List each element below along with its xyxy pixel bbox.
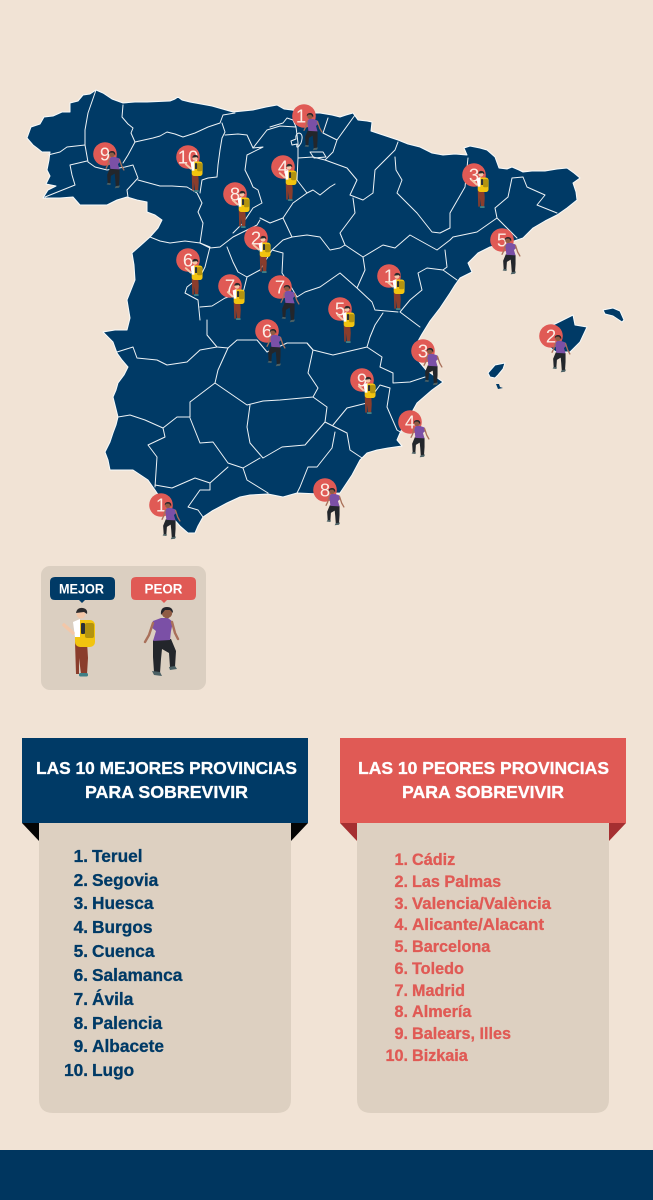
marker: Madrid 7 (peor): 7 [275,276,285,298]
marker: Lugo 10 (mejor) [176,145,203,192]
marker: Barcelona 5 (peor): 5 [497,230,507,250]
list: mejores [64,846,183,1080]
Formentera [496,384,503,389]
list: peores: 5. [394,938,408,956]
legend figure: mejor [64,608,95,676]
list: mejores: 1. [74,846,88,866]
legend panel [41,566,206,690]
list: mejores: Segovia [92,870,159,890]
marker: Las Palmas 2 (peor): 2 [546,326,556,346]
list: mejores: 5. [74,941,88,961]
marker: Cuenca 5 (mejor): 5 [335,298,345,320]
Ibiza [488,363,505,378]
marker: Madrid 7 (peor) [268,275,299,322]
heading: peores: LAS 10 PEORES PROVINCIAS [358,758,609,778]
list: mejores: 7. [74,989,88,1009]
marker: Valencia 3 (peor): 3 [418,340,428,362]
list: peores: Toledo [412,960,464,978]
list: peores: 7. [394,982,408,1000]
heading: peores [358,758,609,802]
mainland silhouette [27,90,580,533]
list: mejores: 10. [64,1060,88,1080]
legend bubble: peor [131,577,196,603]
heading: mejores: PARA SOBREVIVIR [85,782,248,802]
marker: Cuenca 5 (mejor) [328,297,355,343]
marker: Alicante 4 (peor) [398,410,429,457]
list: peores: 8. [394,1003,408,1021]
legend bubble: peor: PEOR [144,580,182,596]
list: mejores: Teruel [92,846,143,866]
list: mejores: 6. [74,965,88,985]
list: mejores: Huesca [92,893,154,913]
list: mejores: Palencia [92,1013,163,1033]
marker: Segovia 2 (mejor): 2 [251,228,261,248]
list: peores: 3. [394,895,408,913]
marker: Huesca 3 (mejor) [462,163,489,208]
list: peores: Bizkaia [412,1047,469,1065]
heading: mejores: LAS 10 MEJORES PROVINCIAS [36,758,297,778]
list: mejores: Salamanca [92,965,183,985]
list: peores: Las Palmas [412,873,501,891]
list: peores: Cádiz [412,851,455,869]
marker: Teruel 1 (mejor) [377,264,405,310]
list: peores: 6. [394,960,408,978]
marker: Almería 8 (peor): 8 [320,480,330,500]
marker: Balears 9 (peor): 9 [100,144,110,164]
footer band [0,1150,653,1200]
list: mejores: Cuenca [92,941,155,961]
list: mejores: Ávila [92,989,134,1009]
marker: Balears 9 (peor) [93,142,124,188]
list: peores: Madrid [412,982,465,1000]
list: mejores: 3. [74,893,88,913]
marker: Ávila 7 (mejor) [218,274,245,320]
marker: Almería 8 (peor) [313,478,344,525]
marker: Toledo 6 (peor) [255,319,285,366]
marker: Valencia 3 (peor) [411,339,442,385]
list: peores: Barcelona [412,938,491,956]
heading: peores: PARA SOBREVIVIR [402,782,564,802]
legend bubble: mejor [50,577,115,603]
list: peores: Valencia/València [412,895,552,913]
list: mejores: 4. [74,917,88,937]
list: peores: Balears, Illes [412,1025,511,1043]
marker: Barcelona 5 (peor) [490,228,520,274]
legend bubble: mejor: MEJOR [59,580,104,596]
marker: Cádiz 1 (peor) [149,493,180,539]
heading: mejores [36,758,297,802]
list: peores: 9. [394,1025,408,1043]
list: mejores: Burgos [92,917,152,937]
marker: Salamanca 6 (mejor) [176,248,203,296]
list: peores: 10. [385,1047,408,1065]
marker: Las Palmas 2 (peor) [539,324,570,372]
Menorca [603,308,624,322]
list: peores: 1. [394,851,408,869]
marker: Salamanca 6 (mejor): 6 [183,250,193,270]
marker: Bizkaia 10 (peor) [292,104,322,150]
marker: Albacete 9 (mejor) [350,368,376,414]
panel: 10 peores provincias [340,738,626,1113]
marker: Segovia 2 (mejor) [244,226,271,273]
marker: Bizkaia 10 (peor): 1 [296,106,306,126]
provincial borders [45,90,557,517]
map of Spain by province [27,90,624,539]
marker: Burgos 4 (mejor) [271,155,297,201]
marker: Palencia 8 (mejor): 8 [230,184,240,204]
list: peores: Almería [412,1003,472,1021]
Mallorca [540,315,587,352]
marker: Alicante 4 (peor): 4 [405,412,415,432]
list: mejores: 9. [74,1036,88,1056]
marker: Ávila 7 (mejor): 7 [225,276,235,296]
list: mejores: Albacete [92,1036,164,1056]
list: mejores: 8. [74,1013,88,1033]
marker: Cádiz 1 (peor): 1 [156,494,166,516]
list: peores: 4. [394,916,408,934]
marker: Huesca 3 (mejor): 3 [469,164,479,186]
marker: Albacete 9 (mejor): 9 [357,370,367,390]
list: peores: 2. [394,873,408,891]
list: peores [385,851,552,1065]
marker: Lugo 10 (mejor): 10 [178,146,198,168]
marker: Teruel 1 (mejor): 1 [384,266,394,286]
marker: Burgos 4 (mejor): 4 [278,156,288,178]
list: mejores: Lugo [92,1060,134,1080]
marker: Palencia 8 (mejor) [223,182,250,228]
panel: 10 mejores provincias [22,738,308,1113]
list: mejores: 2. [74,870,88,890]
marker: Toledo 6 (peor): 6 [262,320,272,342]
list: peores: Alicante/Alacant [412,916,545,934]
legend figure: peor [145,607,178,676]
